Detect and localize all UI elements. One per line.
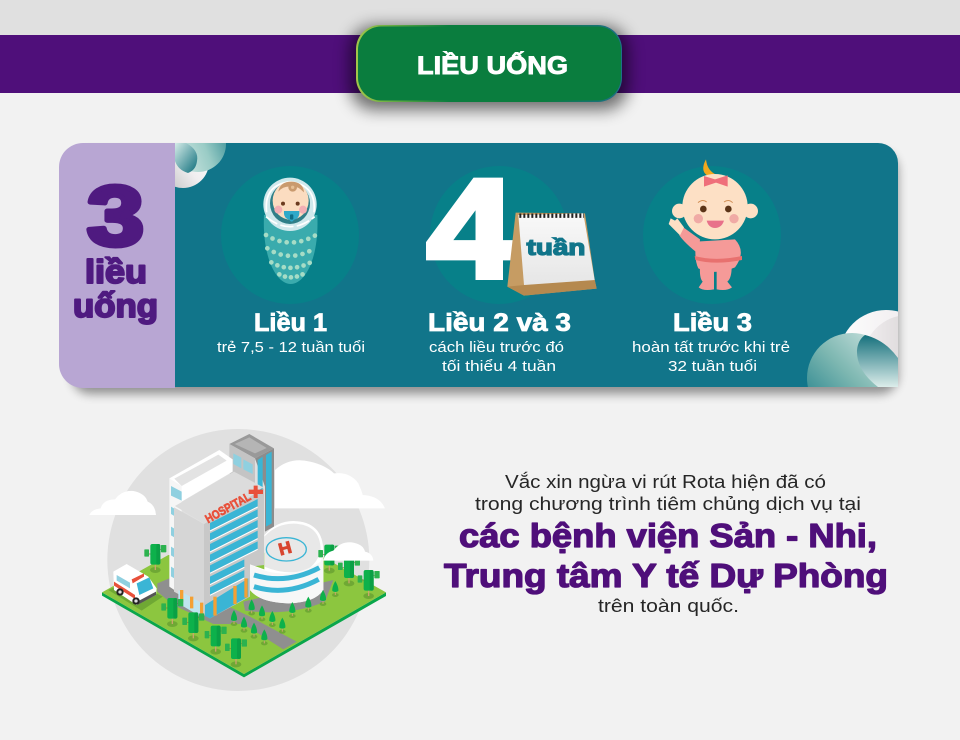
- hospital sign: HOSPITAL: [203, 489, 253, 526]
- calendar: [507, 213, 597, 296]
- helipad H: H: [276, 538, 294, 559]
- decoration: bottom-right swirl: [807, 310, 898, 387]
- icon: swaddled baby: [263, 178, 318, 284]
- header button: Liều uống: [350, 25, 628, 110]
- backdrop circle: [107, 429, 369, 691]
- circle behind dose 2: [430, 166, 568, 304]
- trees: [161, 545, 380, 667]
- highlight line 1: các bệnh viện Sản - Nhi,: [459, 517, 877, 554]
- back wing: [169, 450, 233, 595]
- text: dose 1: [217, 309, 365, 356]
- icon: waving baby: [669, 159, 758, 290]
- header band: [0, 35, 960, 93]
- cloud: small right: [323, 542, 373, 561]
- dose 2-3 note line 1: cách liều trước đó: [429, 340, 564, 356]
- dose 2-3 note line 2: tối thiểu 4 tuần: [442, 359, 556, 375]
- tree: back left: [144, 544, 166, 573]
- dose 3 heading: Liều 3: [673, 309, 752, 337]
- cloud: left: [89, 491, 156, 515]
- dose 1 heading: Liều 1: [254, 309, 327, 337]
- text: doses 2 and 3: [428, 309, 571, 375]
- ground: [102, 552, 386, 677]
- header background strip: [0, 0, 960, 35]
- sign cross: [249, 486, 263, 498]
- elevator tower: [229, 434, 274, 532]
- helipad building: [250, 521, 323, 603]
- closing line: trên toàn quốc.: [598, 595, 739, 616]
- main tower: [174, 472, 264, 619]
- big number 3: 3: [87, 169, 144, 263]
- cloud: right: [275, 460, 385, 508]
- circle behind dose 3: [643, 166, 781, 304]
- label: uống: uống: [73, 287, 158, 324]
- dose 3 note line 1: hoàn tất trước khi trẻ: [632, 340, 790, 356]
- text: dose 3: [632, 309, 790, 375]
- dose 3 note line 2: 32 tuần tuổi: [668, 359, 757, 375]
- intro line 2: trong chương trình tiêm chủng dịch vụ tại: [475, 493, 861, 514]
- intro line 1: Vắc xin ngừa vi rút Rota hiện đã có: [505, 471, 826, 492]
- panel: dosing card: [59, 143, 904, 400]
- button label: LIỀU UỐNG: [417, 50, 568, 80]
- panel: 3 doses sidebar: [59, 143, 175, 388]
- circle behind dose 1: [221, 166, 359, 304]
- text block: availability: [444, 471, 888, 616]
- calendar label: tuần: [527, 235, 585, 260]
- decoration: top-left swirl: [175, 143, 226, 188]
- highlight line 2: Trung tâm Y tế Dự Phòng: [444, 557, 888, 594]
- dose 1 note: trẻ 7,5 - 12 tuần tuổi: [217, 340, 365, 356]
- illustration: hospital: [89, 429, 386, 691]
- label: liều: liều: [85, 253, 147, 290]
- icon: 4 weeks calendar: [427, 150, 597, 307]
- dose 2-3 heading: Liều 2 và 3: [428, 309, 571, 337]
- ambulance: [108, 564, 163, 611]
- big number 4: 4: [427, 150, 515, 307]
